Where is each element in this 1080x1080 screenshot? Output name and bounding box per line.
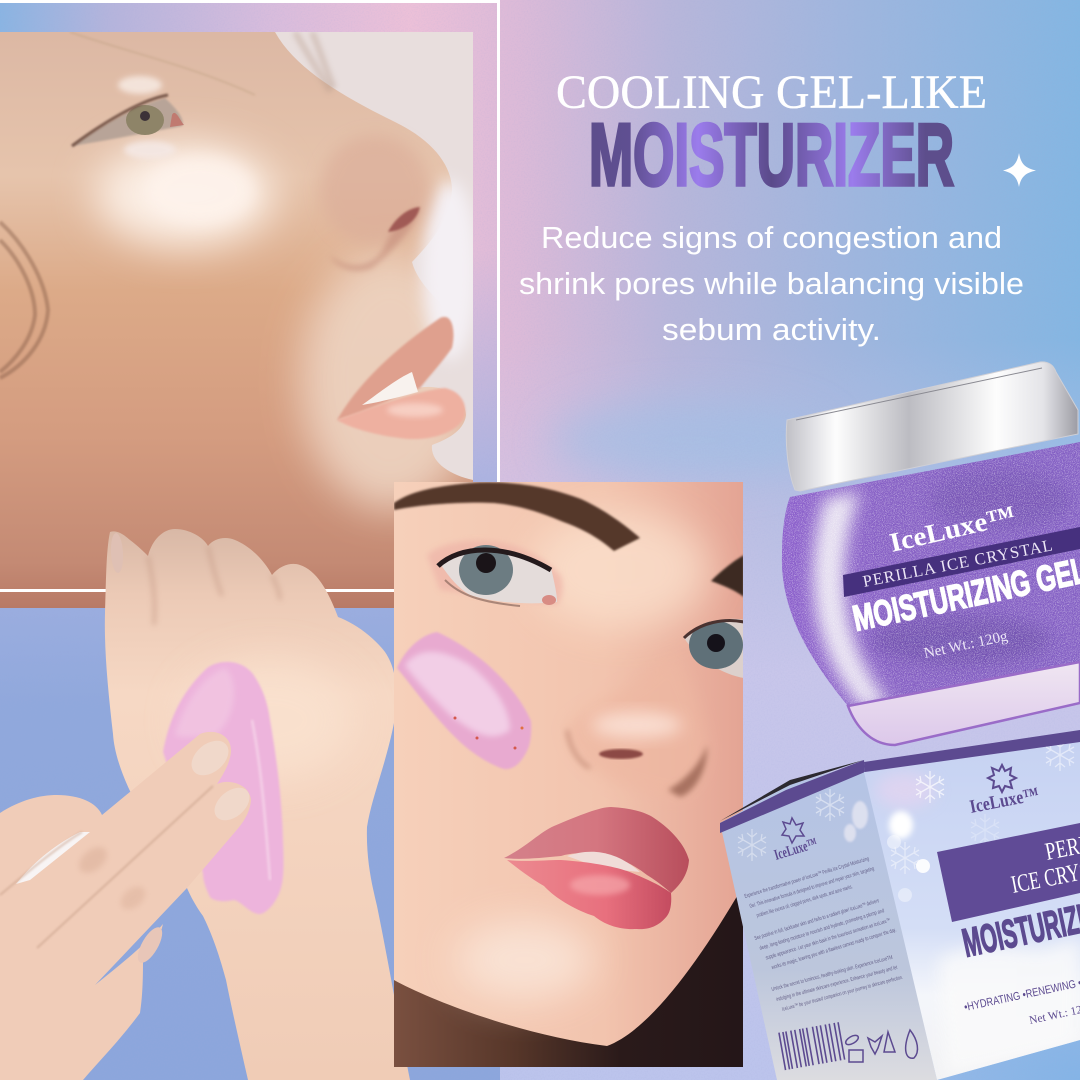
finger creases bbox=[74, 842, 112, 878]
photo: face with pink gel on cheek bbox=[394, 482, 744, 1067]
box side panel: works its magic, leaving you with a flawless canvas ready to conquer the day. bbox=[770, 927, 898, 971]
brand: IceLuxe™ bbox=[968, 784, 1041, 818]
sleeve glimpse bbox=[16, 832, 90, 884]
right brow bbox=[711, 555, 744, 597]
finger divisions bbox=[0, 786, 213, 948]
nostril bbox=[334, 214, 419, 272]
jar body bbox=[780, 440, 1080, 710]
jar label: IceLuxe™ bbox=[887, 500, 1018, 558]
photo: hand with pink gel bbox=[0, 529, 410, 1080]
neck and hair under jaw bbox=[394, 886, 743, 1067]
jar label: PERILLA ICE CRYSTAL bbox=[861, 535, 1055, 591]
description text bbox=[519, 220, 1024, 347]
icon: sparkle bbox=[1003, 153, 1036, 187]
jar label: Net Wt.: 120g bbox=[923, 628, 1010, 662]
box side panel: Unlock the secret to luminous, healthy-looking skin. Experience IceLuxeTM bbox=[771, 955, 894, 993]
nose shading bbox=[320, 135, 430, 245]
lips bbox=[337, 317, 465, 439]
icon: brand star bbox=[988, 765, 1016, 792]
finger gap shadows bbox=[148, 546, 280, 625]
left eye bbox=[427, 540, 562, 606]
jar glass base bbox=[848, 662, 1080, 745]
box side panel: Gel. This innovative formula is designed to improve and repair your skin, targeting bbox=[749, 866, 875, 910]
lips bbox=[504, 807, 689, 929]
photo: face in profile bbox=[0, 32, 480, 608]
description text: sebum activity. bbox=[662, 312, 881, 347]
description text: shrink pores while balancing visible bbox=[519, 266, 1024, 301]
cheek highlight bbox=[95, 143, 275, 247]
right eye bbox=[684, 619, 744, 678]
stray hair bbox=[70, 32, 255, 95]
backdrop behind the profile bbox=[275, 32, 473, 480]
back of hand bbox=[105, 529, 410, 1080]
box side panel: Experience the transformative power of IceLuxe™ Perilla Ice Crystal Moisturizing bbox=[744, 856, 870, 900]
box side panel: problem like excess oil, clogged pores, dark spots, and acne marks. bbox=[756, 884, 854, 919]
care icons bbox=[844, 1030, 917, 1062]
panel text bbox=[1010, 836, 1080, 893]
index nail bbox=[110, 533, 124, 573]
jar label bbox=[843, 500, 1080, 662]
left brow bbox=[394, 482, 640, 551]
barcode bbox=[779, 1022, 845, 1070]
box side panel bbox=[720, 760, 937, 1080]
purple panel bbox=[937, 823, 1080, 922]
fingernails bbox=[185, 734, 235, 782]
hair strands at top bbox=[295, 32, 334, 92]
jar cap bbox=[786, 362, 1078, 491]
box side panel: IceLuxe™ be your trusted companion on your journey to skincare perfection. bbox=[781, 975, 904, 1013]
box side panel: deep, long-lasting moisture to nourish and hydrate, promoting a plump and bbox=[759, 908, 885, 952]
eye bbox=[72, 76, 184, 159]
lower face light area bbox=[300, 250, 480, 510]
hair at left edge bbox=[0, 222, 48, 378]
box side panel: IceLuxe™ bbox=[772, 836, 819, 864]
nose bbox=[563, 707, 710, 800]
box side panel: indulging in the ultimate skincare experience. Enhance your beauty and let bbox=[776, 965, 898, 1003]
description text: Reduce signs of congestion and bbox=[541, 220, 1002, 255]
product jar bbox=[780, 362, 1080, 745]
pink gel smear bbox=[163, 662, 284, 914]
pink gel on cheek bbox=[397, 632, 531, 769]
heading line 1: COOLING GEL-LIKE bbox=[556, 66, 987, 119]
knuckle glow bbox=[185, 660, 355, 780]
box front panel bbox=[864, 730, 1080, 1080]
product box bbox=[720, 730, 1080, 1080]
other hand fingers bbox=[0, 732, 251, 1080]
facial glows bbox=[530, 510, 710, 630]
heading bbox=[556, 66, 987, 204]
box side panel: See positive in full, lackluster skin and hello to a radiant glow! IceLuxe™ delivers bbox=[754, 898, 880, 942]
white frame lines bbox=[0, 2, 498, 590]
box side panel: supple appearance. Let your skin bask in the luxurious sensation as IceLuxe™ bbox=[765, 918, 891, 961]
